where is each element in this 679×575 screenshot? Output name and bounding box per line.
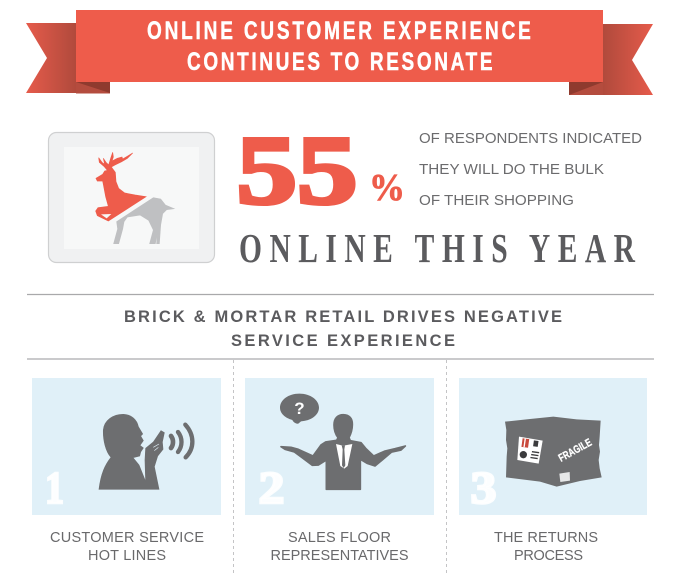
icon: damaged fragile box	[505, 417, 602, 487]
caption 2	[270, 530, 408, 564]
panel: sales floor representatives	[245, 378, 434, 564]
caption 1: CUSTOMER SERVICE	[50, 530, 204, 546]
statistic 55 percent	[236, 117, 405, 225]
section heading: BRICK & MORTAR RETAIL DRIVES NEGATIVE	[124, 308, 562, 326]
icon: person speaking on phone	[99, 414, 192, 489]
panel 3 background	[459, 378, 647, 515]
title ribbon	[26, 10, 653, 95]
title text	[147, 16, 531, 76]
panel: the returns process	[459, 378, 647, 564]
number 2: 2	[258, 463, 284, 513]
icon: speech bubble with question mark: ?	[294, 399, 305, 418]
tablet screen	[64, 147, 199, 249]
ribbon left tail	[26, 23, 110, 94]
caption 1	[50, 530, 204, 564]
panel 2 background	[245, 378, 434, 515]
deer red half	[96, 152, 146, 221]
icon: tablet with deer	[48, 132, 214, 262]
fragile label: FRAGILE	[557, 437, 594, 465]
caption 2: SALES FLOOR	[288, 530, 391, 546]
panel: customer service hot lines	[32, 378, 221, 564]
ribbon main band	[76, 10, 603, 82]
section heading	[124, 308, 562, 350]
section heading: SERVICE EXPERIENCE	[231, 332, 455, 350]
title text: ONLINE CUSTOMER EXPERIENCE	[147, 16, 531, 45]
respondents text: OF RESPONDENTS INDICATED	[419, 131, 642, 147]
55 numeral: 55	[236, 117, 358, 225]
deer grey half	[114, 198, 174, 244]
respondents text: OF THEIR SHOPPING	[419, 193, 574, 209]
respondents text	[419, 131, 642, 209]
caption 2: REPRESENTATIVES	[270, 548, 408, 564]
percent sign: %	[369, 167, 405, 209]
deer	[96, 152, 174, 244]
online this year: ONLINE THIS YEAR	[239, 225, 636, 271]
number 3: 3	[470, 463, 496, 513]
caption 3	[494, 530, 598, 564]
ribbon right tail	[569, 24, 653, 95]
number 1: 1	[45, 463, 64, 513]
tablet body	[48, 132, 214, 262]
caption 3: THE RETURNS	[494, 530, 598, 546]
caption 1: HOT LINES	[88, 548, 166, 564]
icon: speech bubble with question mark	[280, 394, 319, 424]
respondents text: THEY WILL DO THE BULK	[419, 162, 604, 178]
panel 1 background	[32, 378, 221, 515]
icon: shrugging businessman	[281, 415, 405, 489]
title text: CONTINUES TO RESONATE	[187, 47, 493, 76]
caption 3: PROCESS	[514, 548, 583, 564]
